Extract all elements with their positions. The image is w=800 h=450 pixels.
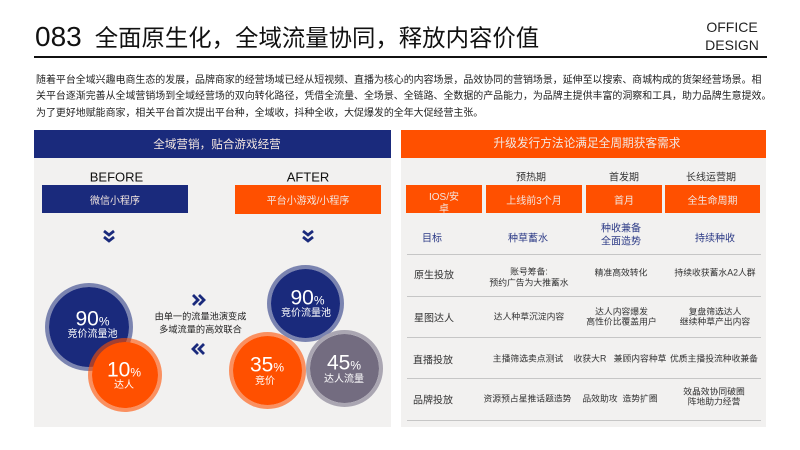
circle: 90% after bbox=[267, 265, 344, 342]
panel: right full-cycle table bbox=[401, 130, 766, 427]
goal: pre: 种草蓄水 bbox=[508, 234, 548, 244]
circle: 90% before bbox=[45, 283, 133, 371]
brand label: DESIGN bbox=[705, 37, 759, 53]
native: pre bbox=[489, 266, 569, 287]
brand: long: 效晶效协同破圈 bbox=[683, 386, 745, 396]
center caption: 多域流量的高效联合 bbox=[159, 324, 242, 334]
row label: native: 原生投放 bbox=[414, 270, 454, 282]
native: pre: 预约广告为大推蓄水 bbox=[489, 277, 569, 287]
intro text block: 为了更好地赋能商家，相关平台首次提出平台种，全域收，抖种全收，大促爆发的全年大促经营主张。 bbox=[36, 108, 483, 119]
stars: long: 复盘筛选达人 bbox=[689, 306, 741, 316]
stars: launch: 达人内容爆发 bbox=[595, 306, 648, 316]
native: launch: 精准高效转化 bbox=[595, 268, 647, 278]
brand: long bbox=[683, 386, 745, 406]
platform box bbox=[406, 185, 482, 213]
90% value: 90% bbox=[75, 307, 110, 330]
left panel heading: 全域营销，贴合游戏经营 bbox=[153, 138, 281, 151]
brand label bbox=[705, 19, 759, 53]
phase label: long: 长线运营期 bbox=[686, 172, 736, 184]
90% value: 90% bbox=[290, 286, 325, 309]
live: launch: 收获大R 兼顾内容种草 bbox=[574, 353, 666, 363]
brand: launch: 品效助攻 造势扩圈 bbox=[582, 394, 658, 404]
phase label: pre: 预热期 bbox=[516, 172, 546, 184]
35% value: 35% bbox=[250, 353, 284, 376]
brand: long: 阵地助力经营 bbox=[688, 396, 740, 406]
goal row label: 目标 bbox=[422, 234, 442, 244]
goal: long: 持续种收 bbox=[695, 234, 735, 244]
live: long: 优质主播投流种收兼备 bbox=[670, 353, 758, 363]
period box: pre: 上线前3个月 bbox=[506, 196, 562, 206]
native: pre: 账号筹备: bbox=[510, 266, 548, 276]
goal: launch: 种收兼备 bbox=[601, 224, 641, 234]
circle: 10% before bbox=[88, 338, 162, 412]
period box: launch bbox=[586, 185, 662, 213]
left panel heading bbox=[34, 130, 391, 158]
icon: left chevrons bbox=[191, 343, 205, 355]
after box bbox=[235, 185, 381, 214]
10% value: 10% bbox=[107, 358, 141, 382]
before box bbox=[42, 185, 188, 213]
row label: brand: 品牌投放 bbox=[413, 395, 453, 406]
period box: long: 全生命周期 bbox=[688, 196, 738, 206]
row label: live: 直播投放 bbox=[413, 355, 453, 366]
after box: 平台小游戏/小程序 bbox=[267, 196, 349, 207]
circle: 45% after bbox=[306, 330, 383, 407]
title: 083 全面原生化，全域流量协同，释放内容价值 bbox=[35, 21, 539, 52]
stars: launch bbox=[586, 306, 657, 326]
icon: down chevrons right bbox=[302, 230, 314, 243]
35% caption: 竞价 bbox=[255, 376, 275, 386]
stars: long bbox=[680, 306, 750, 326]
right panel heading bbox=[401, 130, 766, 158]
stars: long: 继续种草产出内容 bbox=[680, 316, 750, 326]
intro text block: 关平台逐渐完善从全域营销场到全域经营场的双向转化路径，凭借全流量、全场景、全链路、全数据的产品能力，为品牌主提供丰富的洞察和工具，助力品牌生意提效。 bbox=[36, 91, 771, 102]
row label: stars: 星图达人 bbox=[414, 314, 454, 324]
90% caption: 竞价流量池 bbox=[68, 328, 118, 340]
platform box: IOS/安 bbox=[429, 192, 459, 203]
panel: left full-domain marketing bbox=[34, 130, 391, 427]
90% caption: 竞价流量池 bbox=[281, 308, 331, 318]
phase label: launch: 首发期 bbox=[609, 172, 639, 184]
45% value: 45% bbox=[327, 351, 361, 374]
icon: right chevrons bbox=[192, 294, 206, 306]
stars: pre: 达人种草沉淀内容 bbox=[494, 312, 564, 322]
goal: launch bbox=[601, 222, 641, 247]
circle: 35% after bbox=[229, 332, 306, 409]
brand label: OFFICE bbox=[706, 19, 758, 35]
brand: pre: 资源预占星推话题造势 bbox=[484, 394, 571, 404]
before box: 微信小程序 bbox=[90, 196, 140, 206]
center caption bbox=[155, 312, 246, 334]
right panel heading: 升级发行方法论满足全周期获客需求 bbox=[493, 137, 680, 150]
icon: down chevrons left bbox=[103, 230, 115, 243]
period box: long bbox=[665, 185, 760, 213]
after label: AFTER bbox=[287, 170, 329, 184]
center caption: 由单一的流量池演变成 bbox=[155, 312, 246, 322]
intro text block bbox=[36, 74, 771, 119]
period box: pre bbox=[486, 185, 582, 213]
intro text block: 随着平台全域兴趣电商生态的发展，品牌商家的经营场域已经从短视频、直播为核心的内容场景，品效协同的营销场景，延伸至以搜索、商城构成的货架经营场景。相 bbox=[36, 75, 761, 86]
45% caption: 达人流量 bbox=[324, 374, 364, 384]
goal: launch: 全面造势 bbox=[601, 236, 641, 247]
live: pre: 主播筛选卖点测试 bbox=[493, 353, 563, 363]
stars: launch: 高性价比覆盖用户 bbox=[586, 316, 657, 326]
before label: BEFORE bbox=[90, 170, 143, 184]
10% caption: 达人 bbox=[114, 380, 134, 391]
native: long: 持续收获蓄水A2人群 bbox=[674, 268, 756, 278]
period box: launch: 首月 bbox=[614, 196, 634, 206]
